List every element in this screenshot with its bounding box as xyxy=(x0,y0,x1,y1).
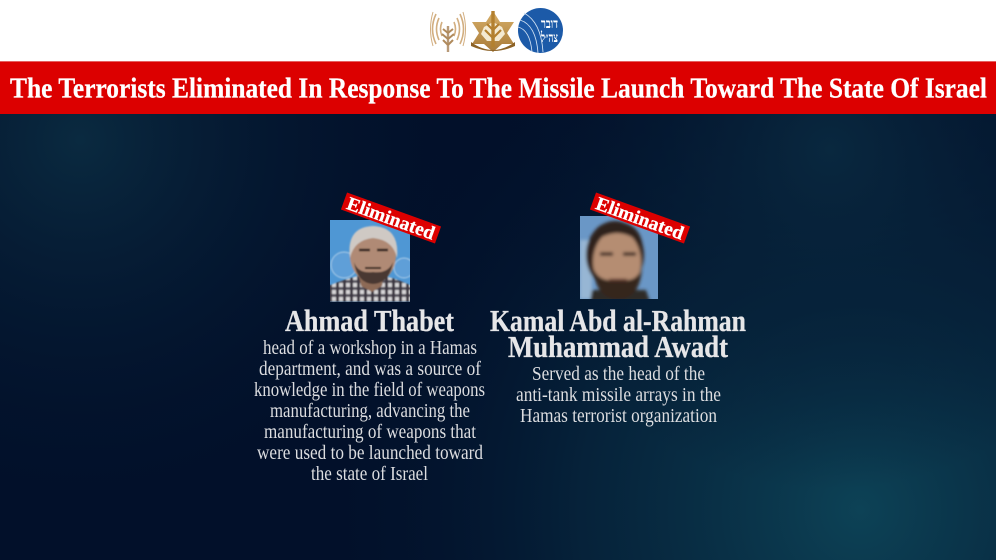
icon: blue round logo xyxy=(518,8,563,53)
name: Ahmad Thabet: Ahmad Thabet xyxy=(285,303,455,338)
background panel xyxy=(0,114,996,560)
photo: Ahmad Thabet xyxy=(328,220,414,302)
badge: Eliminated (left): Eliminated xyxy=(344,193,438,245)
description: Ahmad Thabet xyxy=(254,337,485,485)
badge: Eliminated (right): Eliminated xyxy=(593,193,687,245)
icon: army emblem xyxy=(471,11,515,52)
description: Kamal Abd al-Rahman Muhammad Awadt xyxy=(516,363,721,427)
photo: Kamal Abd al-Rahman Muhammad Awadt xyxy=(580,216,658,302)
description: Ahmad Thabet: head of a workshop in a Hamas xyxy=(263,337,477,359)
description: Ahmad Thabet: manufacturing of weapons that xyxy=(264,421,476,443)
icon: blue round logo: צה״ל xyxy=(540,30,558,46)
description: Ahmad Thabet: manufacturing, advancing the xyxy=(270,400,470,422)
icon: blue round logo: דובר xyxy=(541,17,558,32)
name: Kamal Abd al-Rahman Muhammad Awadt: Muhammad Awadt xyxy=(508,329,729,364)
description: Ahmad Thabet: knowledge in the field of weapons xyxy=(254,379,485,401)
description: Ahmad Thabet: department, and was a source of xyxy=(259,358,481,380)
title banner xyxy=(0,61,996,114)
name: Kamal Abd al-Rahman Muhammad Awadt xyxy=(490,303,746,364)
white header strip xyxy=(0,0,996,61)
description: Ahmad Thabet: the state of Israel xyxy=(311,463,428,485)
description: Kamal Abd al-Rahman Muhammad Awadt: Served as the head of the xyxy=(532,363,705,385)
name: Kamal Abd al-Rahman Muhammad Awadt: Kamal Abd al-Rahman xyxy=(490,303,746,338)
description: Kamal Abd al-Rahman Muhammad Awadt: Hamas terrorist organization xyxy=(520,405,717,427)
description: Kamal Abd al-Rahman Muhammad Awadt: anti-tank missile arrays in the xyxy=(516,384,721,406)
icon: antenna logo xyxy=(430,12,466,52)
description: Ahmad Thabet: were used to be launched toward xyxy=(257,442,483,464)
